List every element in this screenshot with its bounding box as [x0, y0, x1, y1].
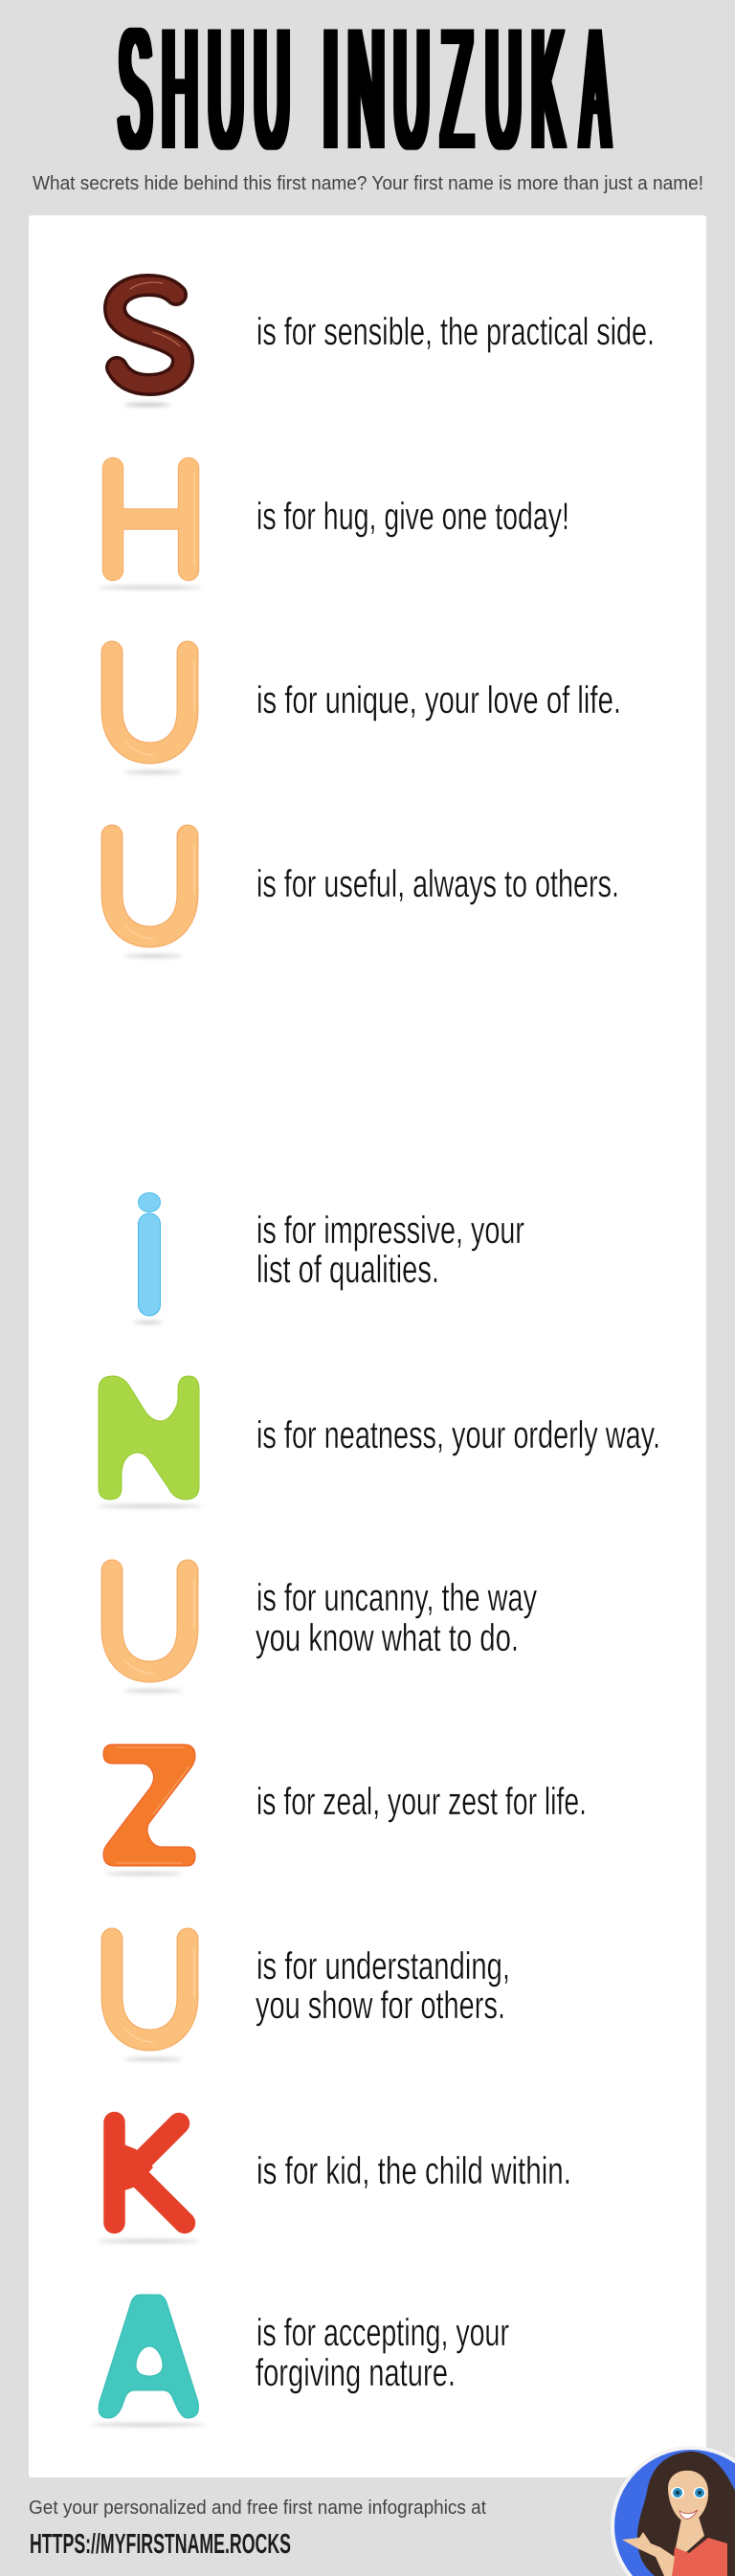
text: A lines: is for accepting, your: [256, 2312, 509, 2354]
text: U lines: you show for others.: [256, 1985, 505, 2027]
avatar: [611, 2446, 735, 2576]
icon: letter A: [91, 2295, 206, 2427]
text: I lines: is for impressive, your: [256, 1210, 524, 1252]
text: U lines: [256, 1945, 510, 2027]
subtitle: What secrets hide behind this first name? Your first name is more than just a name!: [33, 173, 703, 194]
text: A lines: [256, 2312, 509, 2394]
row: U third: [112, 1570, 537, 1692]
icon: letter U: [112, 1570, 194, 1692]
row: I: [134, 1192, 524, 1324]
title: A: [582, 0, 609, 185]
icon: letter Z: [103, 1744, 195, 1876]
row: S: [115, 282, 655, 407]
row: U second: [112, 835, 619, 957]
row: A: [91, 2295, 509, 2427]
title: [119, 0, 609, 185]
icon: letter U: [112, 1939, 194, 2061]
text: U lines: you know what to do.: [256, 1617, 519, 1659]
footer url: HTTPS://MYFIRSTNAME.ROCKS: [30, 2529, 291, 2560]
icon: letter K: [98, 2122, 199, 2243]
text: A lines: forgiving nature.: [256, 2352, 456, 2394]
text: Z line: is for zeal, your zest for life.: [256, 1781, 587, 1823]
text: I lines: [256, 1210, 524, 1291]
text: K line: is for kid, the child within.: [256, 2150, 571, 2192]
footer text: Get your personalized and free first name infographics at: [29, 2498, 486, 2519]
row: U fourth: [112, 1939, 510, 2061]
text: U lines: is for uncanny, the way: [256, 1577, 537, 1619]
icon: letter i: [134, 1192, 163, 1324]
icon: letter U: [112, 835, 194, 957]
row: Z: [103, 1744, 587, 1876]
row: H: [99, 468, 569, 589]
icon: letter N: [97, 1376, 202, 1508]
text: U lines: [256, 1577, 537, 1659]
row: K: [98, 2122, 571, 2243]
text: I lines: list of qualities.: [256, 1249, 439, 1291]
title: I: [323, 0, 339, 185]
icon: letter U: [112, 652, 194, 773]
row: N: [97, 1376, 660, 1508]
row: U: [112, 652, 621, 773]
icon: letter S: [115, 282, 183, 407]
icon: letter H: [99, 468, 202, 589]
text: U lines: is for understanding,: [256, 1945, 510, 1988]
text: H line: is for hug, give one today!: [256, 496, 569, 538]
